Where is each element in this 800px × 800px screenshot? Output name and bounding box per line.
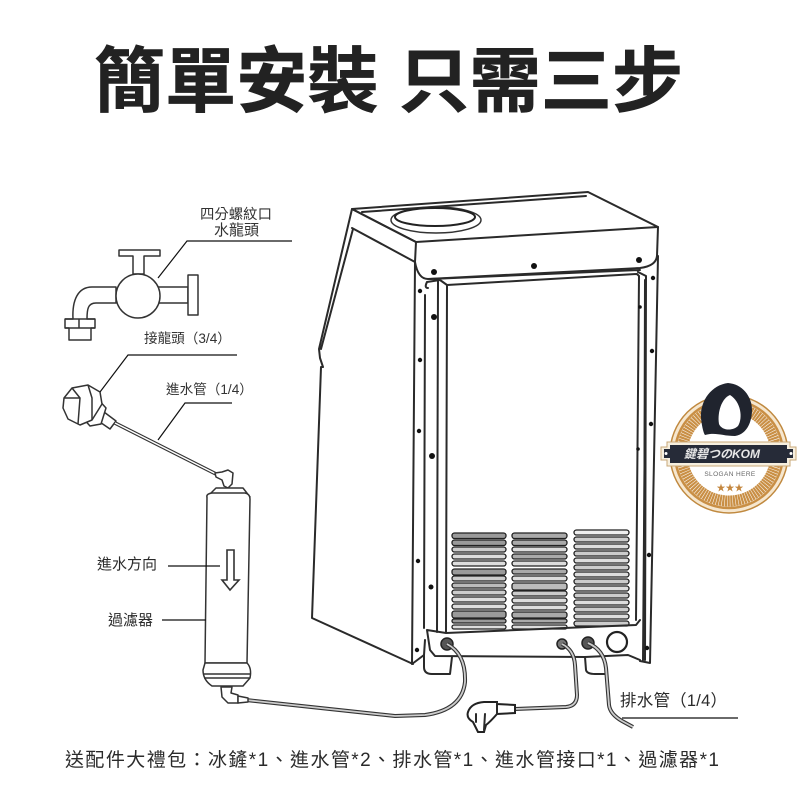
label: filter	[108, 612, 206, 629]
logo slogan: SLOGAN HERE	[704, 471, 756, 478]
vent column 1	[452, 533, 506, 629]
machine side panel	[312, 209, 416, 664]
label: tap connector: 接龍頭（3/4）	[144, 330, 231, 346]
machine bottom panel	[424, 620, 640, 674]
logo badge	[661, 383, 796, 513]
title: 簡單安裝 只需三步	[94, 43, 683, 122]
machine screws	[415, 257, 655, 652]
drain hose	[588, 643, 633, 727]
label: drain pipe	[620, 691, 738, 718]
power cord	[515, 644, 577, 709]
connection ports	[441, 632, 627, 652]
inlet hose	[246, 644, 465, 716]
label: inlet tube: 進水管（1/4）	[166, 381, 253, 397]
vent column 3	[574, 530, 629, 626]
label: filter: 過濾器	[108, 612, 153, 629]
logo hair icon	[701, 383, 752, 436]
accessories note: 送配件大禮包：冰鏟*1、進水管*2、排水管*1、進水管接口*1、過濾器*1	[65, 749, 719, 771]
label: faucet: 水龍頭	[214, 222, 259, 239]
flow arrow	[222, 550, 239, 590]
ice machine	[312, 192, 658, 674]
icon: faucet	[65, 250, 198, 340]
machine top	[352, 192, 658, 279]
label: drain pipe: 排水管（1/4）	[620, 691, 727, 710]
filter	[203, 470, 251, 703]
label: flow direction: 進水方向	[97, 556, 157, 573]
label: flow direction	[97, 556, 220, 573]
label: tap connector	[100, 330, 237, 392]
power plug	[468, 702, 515, 732]
label: faucet	[158, 206, 292, 278]
label: faucet: 四分螺紋口	[200, 206, 272, 223]
machine frame	[412, 256, 658, 664]
label: inlet tube	[158, 381, 253, 440]
icon: tap connector	[63, 385, 116, 429]
inlet tube	[115, 423, 216, 474]
vent column 2	[512, 533, 567, 629]
logo banner: 鍵碧つのKOM	[684, 447, 761, 461]
logo stars: ★★★	[716, 483, 744, 493]
